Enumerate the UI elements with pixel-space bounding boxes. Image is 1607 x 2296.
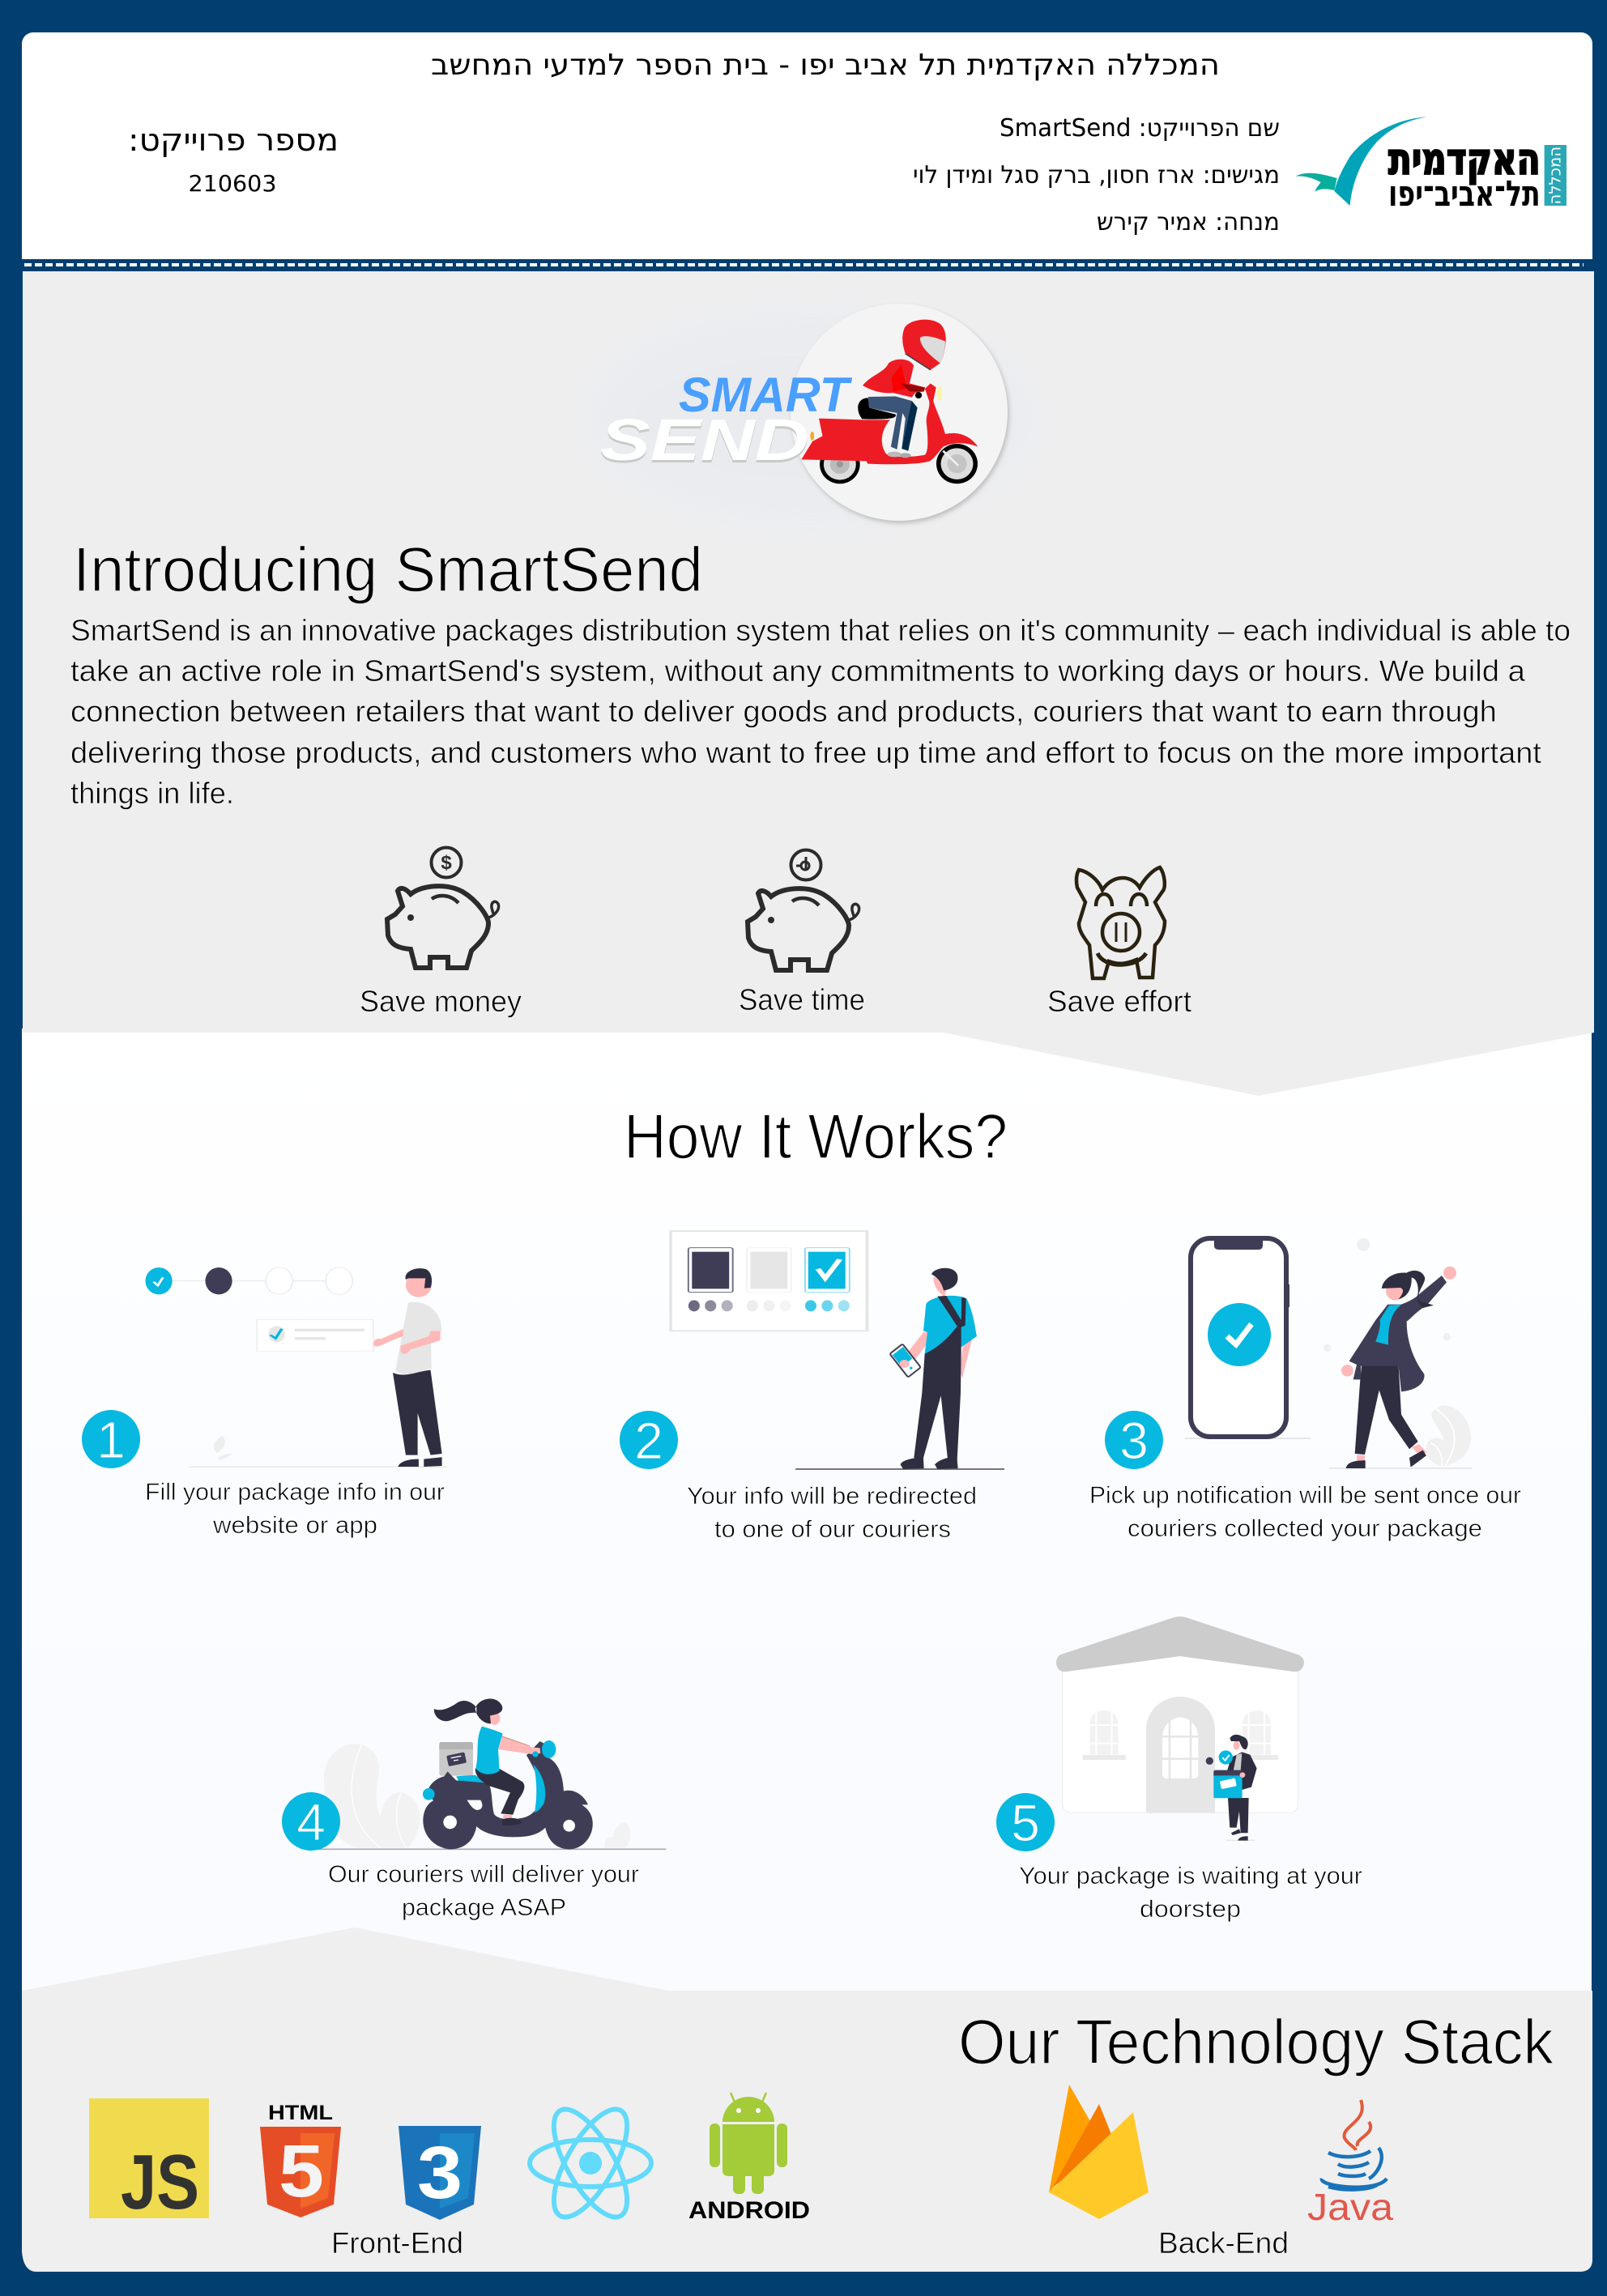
icon: Firebase: [1049, 2085, 1149, 2219]
number badge 2: [620, 1411, 678, 1470]
icon: Android: [688, 2093, 810, 2224]
icon: React: [530, 2099, 651, 2227]
icon: JavaScript: JS: [121, 2139, 199, 2226]
number badge 5: 5: [1011, 1794, 1040, 1852]
step 3 caption: Pick up notification will be sent once our: [1089, 1482, 1521, 1509]
panel: technology stack: [22, 1928, 1592, 2272]
step 3 caption: [1089, 1482, 1521, 1542]
icon: save effort pig face: [1076, 867, 1165, 978]
number badge 3: [1105, 1411, 1163, 1470]
label: save time: Save time: [739, 983, 865, 1016]
project name: שם הפרוייקט: SmartSend: [1000, 114, 1280, 143]
icon: save money piggy bank: $: [441, 852, 452, 874]
panel: step 3: [1089, 1238, 1521, 1542]
icon: scooter rider: [801, 320, 978, 483]
project number label: מספר פרוייקט:: [128, 122, 339, 158]
number badge 1: 1: [96, 1411, 126, 1469]
step 1 caption: [145, 1479, 445, 1539]
presenters: מגישים: ארז חסון, ברק סגל ומידן לוי: [913, 161, 1280, 190]
icon: JavaScript: [89, 2098, 209, 2226]
number badge 4: 4: [296, 1793, 326, 1851]
step 4 caption: Our couriers will deliver your: [328, 1861, 639, 1888]
illustration: phone with check: [1185, 1238, 1311, 1438]
icon: save time piggy bank: [748, 850, 859, 970]
illustration: person filling form: [145, 1267, 447, 1467]
illustration: house with delivery person: [1056, 1617, 1304, 1841]
number badge 3: 3: [1119, 1412, 1149, 1470]
intro paragraph: delivering those products, and customers who want to free up time and effort to focus on the more important: [70, 736, 1542, 769]
number badge 5: [996, 1793, 1055, 1852]
logo word SEND shadow: SEND: [600, 411, 809, 475]
middle white section background: [22, 1029, 1592, 2000]
illustration: color selection board: [671, 1231, 867, 1331]
logo word SMART: SMART: [679, 368, 852, 422]
icon: CSS3: [399, 2126, 481, 2220]
panel: step 2: [620, 1231, 1004, 1543]
number badge 1: [82, 1410, 140, 1469]
logo word SEND: SEND: [600, 408, 809, 473]
step 2 caption: Your info will be redirected: [687, 1483, 977, 1510]
icon: Java: Java: [1307, 2186, 1393, 2228]
label: save money: Save money: [360, 985, 522, 1018]
icon: HTML5: [260, 2102, 341, 2217]
intro paragraph: [70, 614, 1571, 810]
heading: Our Technology Stack: Our Technology Stack: [958, 2006, 1554, 2077]
step 5 caption: [1019, 1863, 1362, 1923]
step 5 caption: Your package is waiting at your: [1019, 1863, 1362, 1889]
soft glow behind logo: [591, 316, 1029, 518]
icon: academic college logo: האקדמית: [1388, 134, 1541, 184]
step 1 caption: Fill your package info in our: [145, 1479, 445, 1506]
icon: academic college logo: המכללה: [1545, 147, 1565, 204]
label: save effort: Save effort: [1047, 985, 1192, 1018]
project number: 210603: [188, 170, 277, 197]
icon: SmartSend logo: [600, 304, 1009, 523]
label: Back-End: Back-End: [1158, 2226, 1289, 2260]
step 3 caption: couriers collected your package: [1127, 1515, 1482, 1542]
illustration: cheering woman: [1324, 1238, 1473, 1468]
number badge 4: [282, 1792, 340, 1851]
intro paragraph: connection between retailers that want to deliver goods and products, couriers that want to earn through: [70, 695, 1497, 728]
header title: המכללה האקדמית תל אביב יפו - בית הספר למדעי המחשב: [431, 49, 1220, 82]
icon: Java: [1307, 2100, 1393, 2228]
icon: CSS3: 3: [417, 2132, 462, 2214]
step 5 caption: doorstep: [1140, 1896, 1241, 1923]
panel: step 1: [82, 1267, 447, 1539]
icon: save money piggy bank: [387, 847, 499, 968]
icon: academic college logo: [1295, 117, 1567, 215]
illustration: man with phone: [889, 1268, 977, 1469]
panel: step 5: [996, 1617, 1362, 1923]
icon: Android: ANDROID: [688, 2197, 810, 2224]
step 4 caption: [328, 1861, 639, 1921]
intro paragraph: SmartSend is an innovative packages distribution system that relies on it's community – each individual is able to: [70, 614, 1571, 647]
icon: academic college logo: תל־אביב־יפו: [1388, 173, 1541, 215]
supervisor: מנחה: אמיר קירש: [1097, 208, 1280, 236]
icon: HTML5: 5: [279, 2130, 324, 2213]
heading: Introducing SmartSend: Introducing SmartSend: [73, 534, 703, 605]
number badge 2: 2: [634, 1412, 663, 1470]
step 4 caption: package ASAP: [402, 1894, 566, 1921]
intro paragraph: take an active role in SmartSend's system, without any commitments to working days or hours. We build a: [70, 654, 1525, 688]
panel: introduction: [23, 271, 1594, 1096]
step 1 caption: website or app: [212, 1512, 377, 1539]
panel: header card: [22, 32, 1592, 259]
illustration: courier on scooter: [315, 1698, 666, 1849]
heading: How It Works?: How It Works?: [624, 1101, 1008, 1172]
step 2 caption: [687, 1483, 977, 1543]
icon: HTML5: HTML: [268, 2102, 333, 2124]
label: Front-End: Front-End: [331, 2226, 463, 2260]
step 2 caption: to one of our couriers: [714, 1516, 951, 1543]
panel: step 4: [282, 1698, 666, 1921]
ground line: [795, 1468, 1004, 1470]
intro paragraph: things in life.: [70, 777, 234, 810]
